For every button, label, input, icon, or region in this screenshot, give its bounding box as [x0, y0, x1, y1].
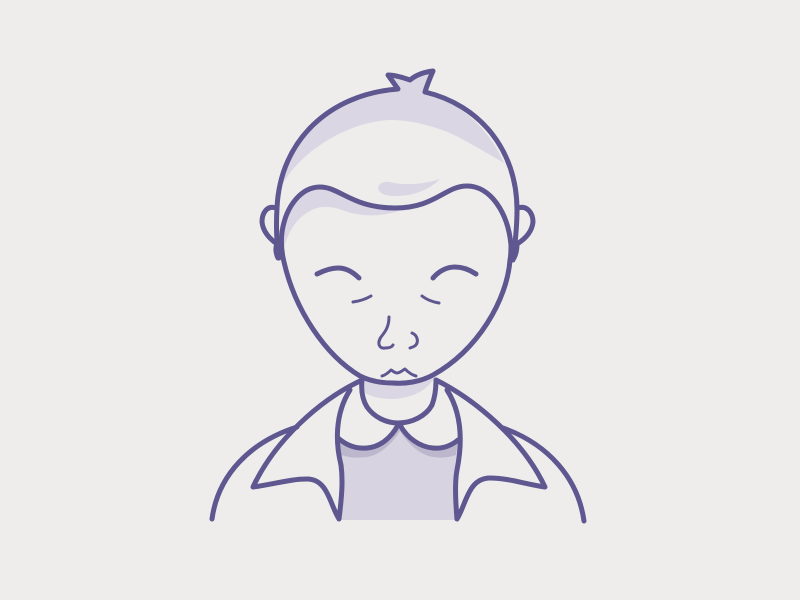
forehead shadow	[282, 187, 402, 252]
neck collar	[362, 380, 436, 423]
right eyebrow	[433, 267, 476, 278]
lips	[382, 369, 416, 376]
neck shadow	[362, 376, 435, 399]
left eyebrow	[317, 268, 359, 278]
right shirt collar	[400, 425, 458, 448]
right sleeve	[503, 428, 584, 521]
left sleeve	[212, 427, 297, 519]
left eyelid	[353, 296, 371, 302]
head outline and tuft	[276, 71, 517, 260]
right ear	[514, 207, 533, 258]
nose	[379, 317, 417, 348]
right jacket lapel	[436, 380, 545, 519]
left shirt collar	[338, 425, 398, 448]
face outline	[281, 186, 511, 383]
left jacket lapel	[253, 381, 360, 519]
right nostril	[410, 333, 417, 348]
shirt	[338, 425, 458, 520]
left ear	[262, 207, 278, 258]
hair highlight	[378, 179, 440, 196]
right eyelid	[422, 296, 439, 303]
hair shadow	[282, 71, 504, 185]
shirt collar shadow	[338, 425, 458, 458]
